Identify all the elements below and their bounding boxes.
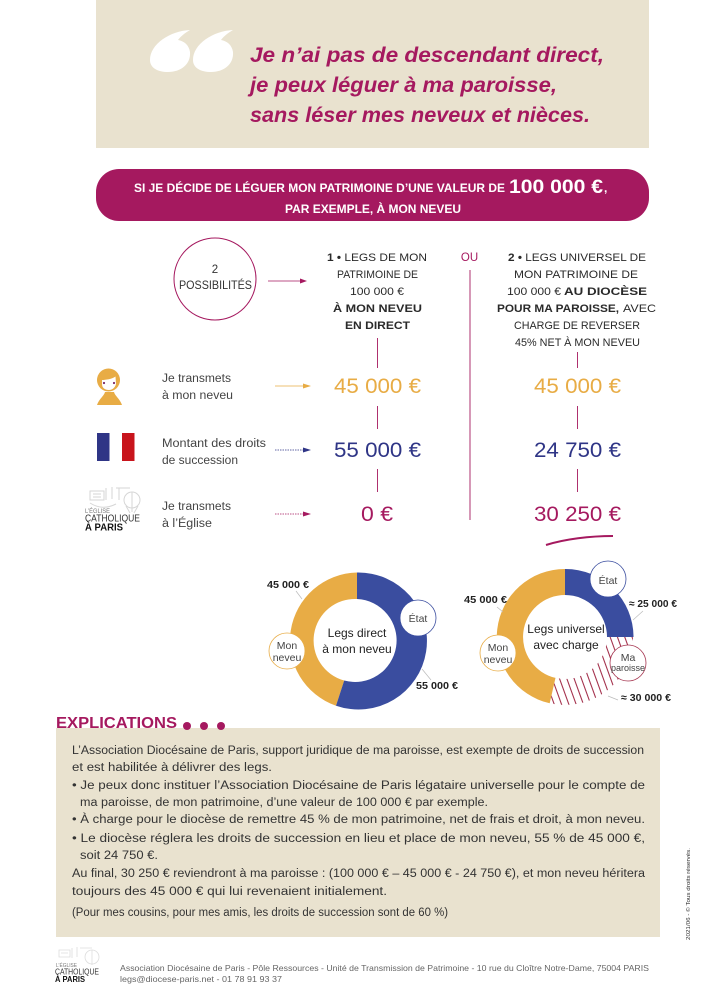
panel: explications: Au final, 30 250 € reviendront à ma paroisse : (100 000 € – 45 000 € - 24 750 €), et mon neveu héritera bbox=[72, 868, 646, 880]
arrow: to options bbox=[268, 278, 307, 284]
logo: footer: À PARIS bbox=[55, 975, 86, 984]
bubble: Mon neveu: Mon bbox=[488, 642, 508, 654]
quote text: Je n’ai pas de descendant direct, bbox=[250, 44, 604, 67]
panel: explications: toujours des 45 000 € qui lui revenaient initialement. bbox=[72, 886, 387, 898]
label: ou: OU bbox=[461, 252, 478, 264]
icon: quotation marks bbox=[150, 30, 233, 72]
heading: explications bbox=[56, 715, 225, 732]
heading: option 2: POUR MA PAROISSE, bbox=[497, 303, 619, 315]
value label: 45 000 bbox=[267, 579, 309, 599]
panel: explications: • À charge pour le diocèse de remettre 45 % de mon patrimoine, net de frais et droit, à mon neveu. bbox=[72, 813, 645, 826]
credit: vertical: 2021/06 - © Tous droits réservés. bbox=[685, 848, 692, 940]
panel: explications bbox=[56, 728, 660, 937]
icon: nephew bbox=[97, 368, 122, 405]
heading: option 1: PATRIMOINE DE bbox=[337, 269, 418, 281]
logo: footer bbox=[55, 947, 99, 984]
value label: 45 000: 45 000 € bbox=[267, 579, 309, 591]
heading: option 1 bbox=[327, 252, 427, 332]
bubble: Ma paroisse: paroisse bbox=[611, 663, 645, 673]
value: 45 000 option 2: 45 000 € bbox=[534, 375, 621, 398]
value: 30 250 option 2: 30 250 € bbox=[534, 503, 621, 526]
bubble: Mon neveu: neveu bbox=[273, 652, 301, 664]
logo: Église catholique à Paris bbox=[85, 487, 140, 534]
circle: 2 possibilités bbox=[174, 238, 256, 320]
footer: contact bbox=[120, 963, 649, 984]
footer: contact: Association Diocésaine de Paris - Pôle Ressources - Unité de Transmission de Patrimoine - 10 rue du Cloître Notre-Dame, 75004 PARIS bbox=[120, 963, 649, 973]
bubble: Mon neveu: neveu bbox=[484, 654, 512, 666]
quote text bbox=[247, 44, 604, 127]
panel: explications: et est habilitée à délivrer des legs. bbox=[72, 762, 272, 774]
row label: je transmets à l'Église bbox=[162, 501, 231, 530]
logo: footer: L’ÉGLISE bbox=[56, 962, 78, 969]
row label: montant des droits bbox=[162, 438, 266, 467]
heading: option 2: AVEC bbox=[623, 303, 656, 315]
arrow: blue bbox=[275, 448, 311, 452]
bubble: État bbox=[590, 561, 626, 597]
value: 55 000 option 1: 55 000 € bbox=[334, 439, 421, 462]
heading: option 2 bbox=[497, 252, 656, 349]
bubble: Mon neveu bbox=[480, 635, 516, 671]
value label: 55 000: 55 000 € bbox=[416, 680, 458, 692]
panel: explications: (Pour mes cousins, pour mes amis, les droits de succession sont de 60 %) bbox=[72, 907, 448, 919]
quote text: je peux léguer à ma paroisse, bbox=[247, 74, 557, 97]
logo: Église catholique à Paris: CATHOLIQUE bbox=[85, 514, 140, 524]
heading: option 2: 45% NET À MON NEVEU bbox=[515, 336, 640, 349]
value: 24 750 option 2: 24 750 € bbox=[534, 439, 621, 462]
row label: je transmets à l'Église: à l’Église bbox=[162, 517, 212, 530]
bubble: Mon neveu bbox=[269, 633, 305, 669]
arrow: wine bbox=[275, 512, 311, 516]
value: 45 000 option 1: 45 000 € bbox=[334, 375, 421, 398]
chart: donut universal: Legs universel bbox=[527, 622, 605, 636]
value label: 45 000 bbox=[464, 594, 507, 612]
bubble: État: État bbox=[409, 612, 427, 625]
heading: option 1: 1 • LEGS DE MON bbox=[327, 252, 427, 264]
arrow: yellow bbox=[275, 384, 311, 388]
heading: option 2: 100 000 € bbox=[507, 286, 561, 298]
panel: explications: L’Association Diocésaine de Paris, support juridique de ma paroisse, est exempte de droits de succession bbox=[72, 745, 644, 757]
bubble: Ma paroisse: Ma bbox=[621, 652, 635, 664]
icon: French flag bbox=[97, 433, 134, 461]
circle: 2 possibilités: 2 bbox=[212, 264, 218, 276]
value label: 25 000 bbox=[629, 598, 677, 620]
row label: je transmets à mon neveu bbox=[162, 373, 233, 402]
panel: quote bbox=[96, 0, 649, 148]
chart: donut universal bbox=[464, 561, 677, 710]
logo: Église catholique à Paris: À PARIS bbox=[85, 520, 123, 534]
heading: option 2: AU DIOCÈSE bbox=[564, 285, 647, 298]
panel: explications: ma paroisse, de mon patrimoine, d’une valeur de 100 000 € par exemple. bbox=[80, 797, 488, 809]
bubble: Ma paroisse bbox=[610, 645, 646, 681]
value label: 55 000 bbox=[416, 669, 458, 692]
row label: je transmets à mon neveu: à mon neveu bbox=[162, 390, 233, 402]
bubble: État bbox=[400, 600, 436, 636]
banner: legacy value: , bbox=[604, 181, 607, 195]
logo: footer: CATHOLIQUE bbox=[55, 968, 99, 976]
heading: option 1: À MON NEVEU bbox=[333, 302, 422, 315]
chart: donut universal: avec charge bbox=[533, 638, 599, 652]
footer: contact: legs@diocese-paris.net - 01 78 91 93 37 bbox=[120, 974, 282, 984]
chart: donut direct bbox=[267, 572, 458, 709]
value label: 45 000: 45 000 € bbox=[464, 594, 507, 606]
panel: explications: • Je peux donc instituer l’Association Diocésaine de Paris légataire universelle pour le compte de bbox=[72, 780, 645, 792]
bubble: Mon neveu: Mon bbox=[277, 640, 297, 652]
heading: option 1: EN DIRECT bbox=[345, 320, 410, 332]
heading: option 1: 100 000 € bbox=[350, 286, 404, 298]
heading: explications: EXPLICATIONS bbox=[56, 715, 177, 732]
row label: je transmets à mon neveu: Je transmets bbox=[162, 373, 231, 385]
banner: legacy value: PAR EXEMPLE, À MON NEVEU bbox=[285, 201, 461, 216]
quote text: sans léser mes neveux et nièces. bbox=[250, 104, 590, 127]
row label: je transmets à l'Église: Je transmets bbox=[162, 501, 231, 513]
heading: option 2: CHARGE DE REVERSER bbox=[514, 320, 640, 332]
value label: 30 000: ≈ 30 000 € bbox=[621, 692, 671, 704]
row label: montant des droits: de succession bbox=[162, 455, 238, 467]
logo: Église catholique à Paris: L’ÉGLISE bbox=[85, 506, 111, 515]
banner: legacy value: SI JE DÉCIDE DE LÉGUER MON PATRIMOINE D’UNE VALEUR DE bbox=[134, 180, 505, 195]
banner: legacy value: 100 000 € bbox=[509, 177, 603, 198]
heading: option 2: 2 • LEGS UNIVERSEL DE bbox=[508, 252, 646, 264]
value: 0 option 1: 0 € bbox=[361, 503, 393, 526]
accent: underline bbox=[546, 536, 613, 545]
heading: option 2: MON PATRIMOINE DE bbox=[514, 269, 638, 281]
value label: 25 000: ≈ 25 000 € bbox=[629, 598, 677, 610]
chart: donut direct: Legs direct bbox=[328, 626, 387, 640]
panel: explications: • Le diocèse réglera les droits de succession en lieu et place de mon neveu, 55 % de 45 000 €, bbox=[72, 833, 645, 845]
row label: montant des droits: Montant des droits bbox=[162, 438, 266, 450]
panel: explications: soit 24 750 €. bbox=[80, 850, 158, 862]
bubble: État: État bbox=[599, 574, 617, 587]
banner: legacy value bbox=[96, 169, 649, 221]
chart: donut direct: à mon neveu bbox=[322, 642, 392, 656]
circle: 2 possibilités: POSSIBILITÉS bbox=[179, 279, 252, 292]
